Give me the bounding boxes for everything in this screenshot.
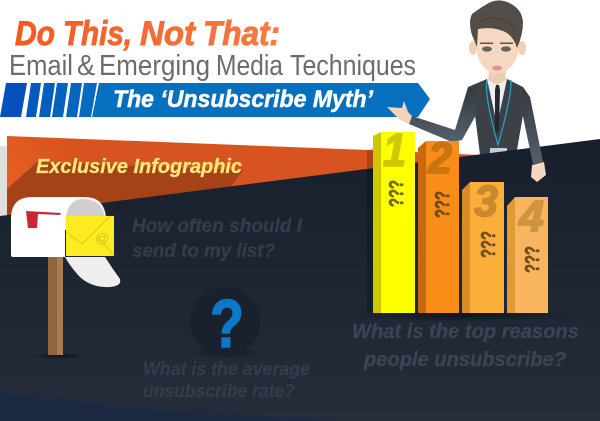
question: how often: How often should I	[132, 216, 303, 237]
title: Do This, Not That	[15, 15, 280, 53]
person head	[469, 0, 526, 85]
subtitle	[9, 50, 416, 82]
hair	[470, 0, 523, 48]
badge	[490, 148, 507, 155]
subtitle: Email	[9, 50, 73, 82]
icon: question mark circle	[187, 286, 263, 362]
lanyard	[486, 80, 511, 145]
bar 4: ???	[522, 246, 544, 273]
title: Do This, Not That: Do	[15, 15, 55, 53]
bar 1: 1	[383, 124, 406, 176]
bar 4	[507, 192, 548, 313]
envelope	[66, 216, 114, 256]
question: how often: send to my list?	[132, 241, 275, 262]
bar 3: ???	[478, 231, 500, 258]
subtitle: Emerging	[99, 50, 210, 82]
bar 2: ???	[432, 191, 454, 218]
left grey strip	[0, 146, 8, 218]
envelope: @	[95, 230, 109, 246]
person right arm	[522, 87, 546, 182]
subtitle: &	[77, 50, 95, 82]
mailbox flag	[26, 211, 61, 228]
bar 2: 2	[427, 134, 453, 183]
bar 4: 4	[518, 192, 544, 241]
bar 3: 3	[474, 177, 498, 226]
bar 1	[373, 124, 415, 313]
question: top reasons: people unsubscribe?	[363, 349, 566, 371]
title: Do This, Not That: This,	[63, 15, 132, 53]
mouth	[492, 66, 502, 70]
floor shadow	[350, 308, 580, 322]
question: top reasons: What is the top reasons	[352, 321, 579, 343]
hand	[387, 101, 412, 124]
face	[477, 26, 518, 74]
fist	[531, 162, 546, 182]
ears	[469, 41, 477, 55]
question: average rate	[143, 359, 310, 401]
banner text: The ‘Unsubscribe Myth’	[113, 86, 373, 113]
title: Do This, Not That: Not	[140, 15, 197, 53]
bar 1: ???	[386, 180, 408, 207]
person arm pointing	[387, 87, 476, 142]
jacket	[468, 79, 523, 155]
question: average rate: unsubscribe rate?	[143, 381, 295, 401]
subtitle: Media	[216, 50, 284, 82]
title: Do This, Not That: That:	[203, 15, 280, 53]
question: top reasons	[352, 321, 579, 371]
bar 2	[418, 134, 459, 313]
person torso	[468, 78, 523, 155]
bar 3	[462, 177, 504, 313]
eyes	[482, 46, 492, 52]
dark lower background	[0, 139, 600, 421]
orange ribbon	[7, 136, 480, 230]
question: average rate: What is the average	[143, 359, 310, 379]
tie	[495, 85, 500, 134]
bottom blue band	[0, 392, 340, 421]
icon: question mark circle: ?	[210, 286, 244, 362]
icon: mailbox	[11, 197, 120, 360]
subtitle: Techniques	[290, 50, 416, 82]
ribbon label: Exclusive Infographic	[36, 156, 242, 178]
bar shadow	[367, 148, 373, 313]
question: how often	[132, 216, 303, 262]
banner	[0, 83, 430, 117]
